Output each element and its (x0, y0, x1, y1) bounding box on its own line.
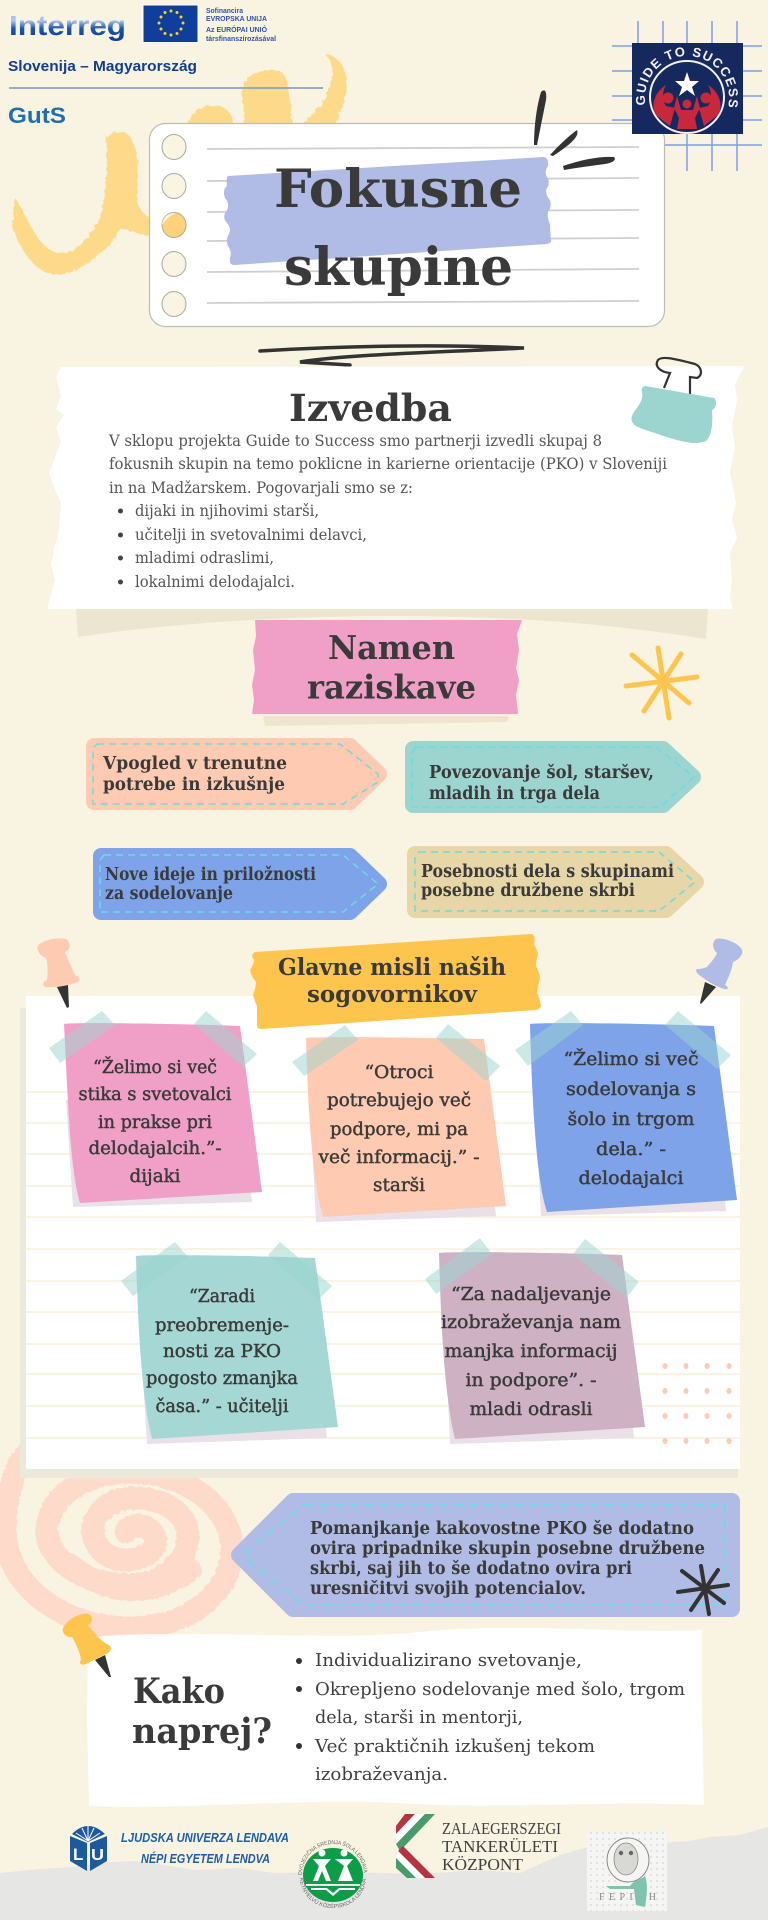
torn gray paper footer (0, 1827, 768, 1920)
binder rings (162, 134, 186, 316)
chevron K (396, 1814, 435, 1878)
quote (317, 1063, 480, 1196)
quote: “Za nadaljevanje (451, 1285, 611, 1305)
project logo: Guide to Success (632, 43, 743, 134)
quote: “Želimo si več (564, 1049, 698, 1070)
name: KÖZPONT (442, 1855, 524, 1874)
arrow: connecting: Povezovanje šol, staršev, (429, 763, 654, 783)
quote: izobraževanja nam (441, 1313, 621, 1333)
recommendations list: izobraževanja. (315, 1764, 448, 1785)
arrow: special groups (415, 852, 696, 911)
arrow: special groups: posebne družbene skrbi (421, 881, 635, 901)
participants list: lokalnimi delodajalci. (135, 573, 295, 591)
recommendations list: Več praktičnih izkušenj tekom (314, 1736, 595, 1757)
recommendations list (296, 1650, 685, 1785)
title: skupine (284, 237, 513, 298)
icon: yellow asterisk (626, 648, 697, 718)
logo: Ljudska univerza Lendava (70, 1826, 289, 1871)
quote: podpore, mi pa (330, 1120, 468, 1140)
name: ZALAEGERSZEGI (442, 1819, 561, 1838)
heading panel: research purpose: raziskave (307, 668, 476, 706)
quote: “Otroci (364, 1063, 434, 1083)
title (274, 159, 522, 298)
quote: dela.” - (596, 1140, 666, 1160)
quote: stika s svetovalci (78, 1085, 232, 1105)
quote: in prakse pri (98, 1113, 212, 1133)
logo: Zalaegerszegi Tankerületi Központ (396, 1814, 561, 1878)
tape (121, 1242, 188, 1296)
arrow: new ideas (100, 855, 379, 912)
quote: manjka informacij (444, 1342, 618, 1362)
EU co-funding text (206, 8, 276, 43)
panel: how forward (87, 1628, 704, 1807)
heading banner: main thoughts: Glavne misli naših (278, 954, 506, 981)
yellow scribble decoration (12, 54, 347, 274)
quote (441, 1285, 621, 1420)
quote: nosti za PKO (163, 1342, 281, 1362)
participants list: dijaki in njihovimi starši, (135, 502, 319, 520)
arrow: connecting: mladih in trga dela (429, 784, 600, 804)
heading shadow (263, 716, 509, 726)
panel: execution shadow (76, 609, 708, 639)
tape (425, 1238, 492, 1294)
logo: green school emblem (298, 1840, 368, 1908)
logo: green school emblem: DVOJEZIČNA SREDNJA ŠOLA LENDAVA (298, 1840, 368, 1875)
quote: delodajalci (578, 1169, 684, 1189)
tape (49, 1011, 115, 1063)
recommendations list: dela, starši in mentorji, (315, 1707, 523, 1728)
blue grid behind project logo (612, 21, 762, 171)
icon: peach pin (37, 938, 79, 1008)
panel: execution (47, 366, 745, 609)
logo: Ljudska univerza Lendava: NÉPI EGYETEM LENDVA (141, 1851, 270, 1866)
logo: owl emblem (587, 1832, 667, 1911)
emphasis marks (534, 90, 615, 170)
owl (614, 1843, 638, 1875)
tape (292, 1025, 358, 1076)
quote: šolo in trgom (568, 1110, 695, 1130)
heading panel: research purpose: Namen (328, 628, 455, 667)
arrow callout: vulnerable groups (239, 1501, 732, 1609)
quote: mladi odrasli (470, 1400, 593, 1420)
arrow: connecting (412, 747, 694, 807)
quote: starši (373, 1176, 425, 1196)
quote: “Želimo si več (93, 1057, 217, 1078)
quote: in podpore”. - (466, 1371, 597, 1391)
participants list (118, 502, 367, 591)
Interreg wordmark: Interreg (9, 10, 126, 41)
arrow callout: vulnerable groups: Pomanjkanje kakovostne PKO še dodatno (310, 1519, 694, 1539)
sticky note: teachers (121, 1242, 338, 1444)
heading: Izvedba: Izvedba (289, 386, 452, 430)
EU flag (143, 5, 198, 42)
panel: quotes paper (20, 996, 740, 1478)
arrow: insight: Vpogled v trenutne (102, 754, 287, 774)
icon: teal binder clip (632, 358, 716, 443)
sticky note: young adults (425, 1238, 645, 1444)
arrow: insight: potrebe in izkušnje (103, 775, 285, 795)
sticky note: parents (292, 1024, 506, 1222)
hand-drawn underline scribble (260, 346, 524, 365)
arrow callout: vulnerable groups: uresničitvi svojih potencialov. (310, 1579, 586, 1599)
participants list: mladimi odraslimi, (135, 549, 274, 567)
quote: “Zaradi (189, 1287, 255, 1307)
intro text: fokusnih skupin na temo poklicne in karierne orientacije (PKO) v Sloveniji (109, 455, 667, 473)
quote: časa.” - učitelji (156, 1397, 289, 1417)
arrow callout: vulnerable groups: skrbi, saj jih to še dodatno ovira pri (310, 1559, 632, 1579)
header: Interreg and EU logos (9, 5, 276, 43)
arrow: new ideas: za sodelovanje (105, 884, 233, 904)
EU co-funding text: Sofinancira (206, 8, 243, 15)
spiral decoration (5, 1450, 232, 1628)
book icon (70, 1826, 107, 1871)
name: LJUDSKA UNIVERZA LENDAVA (121, 1830, 289, 1845)
quote: dijaki (130, 1167, 181, 1187)
intro text: V sklopu projekta Guide to Success smo partnerji izvedli skupaj 8 (108, 432, 602, 450)
quote (78, 1057, 232, 1187)
heading banner: main thoughts (250, 934, 541, 1029)
sticky note: students (49, 1011, 262, 1207)
EU co-funding text: EVROPSKA UNIJA (206, 16, 267, 23)
title: Fokusne (274, 159, 522, 220)
quote: potrebujejo več (327, 1091, 471, 1111)
quote: delodajalcih.”- (88, 1139, 222, 1159)
logo: green school emblem: KÉTNYELVŰ KÖZÉPISKOLA LENDVA (300, 1878, 366, 1908)
icon: dark asterisk (678, 1566, 728, 1614)
intro text (108, 432, 667, 497)
quote: več informacij.” - (317, 1148, 480, 1168)
title card (150, 124, 664, 326)
name: TANKERÜLETI (442, 1837, 558, 1856)
arrow: special groups: Posebnosti dela s skupinami (421, 862, 674, 882)
arrow: insight (93, 744, 379, 804)
recommendations list: Individualizirano svetovanje, (315, 1650, 582, 1671)
title highlight tape (224, 157, 551, 265)
project short name: GutS (8, 103, 66, 128)
ruled lines (207, 147, 639, 303)
heading panel: research purpose (252, 620, 522, 714)
name (442, 1819, 561, 1874)
quote: sodelovanja s (566, 1080, 696, 1100)
recommendations list: Okrepljeno sodelovanje med šolo, trgom (315, 1679, 685, 1700)
quote: preobremenje- (155, 1316, 289, 1336)
panel: how forward: naprej? (132, 1711, 272, 1752)
book icon: U (91, 1847, 104, 1864)
sticky note: employers (515, 1011, 737, 1216)
logo: owl emblem: FEPIÁH (599, 1891, 656, 1903)
programme name: Slovenija – Magyarország (8, 59, 197, 75)
icon: yellow pin (63, 1614, 111, 1677)
quote (564, 1049, 698, 1189)
tape (515, 1011, 583, 1066)
book icon: L (73, 1845, 83, 1864)
heading banner: main thoughts: sogovornikov (307, 981, 478, 1008)
participants list: učitelji in svetovalnimi delavci, (135, 526, 367, 544)
quote: pogosto zmanjka (146, 1369, 298, 1389)
project logo: Guide to Success: GUIDE TO SUCCESS (636, 47, 738, 108)
dot grid (662, 1363, 732, 1444)
quote (146, 1287, 298, 1417)
arrow callout: vulnerable groups: ovira pripadnike skupin posebne družbene (310, 1539, 705, 1559)
EU co-funding text: Az EURÓPAI UNIÓ (206, 25, 268, 34)
EU co-funding text: társfinanszírozásával (206, 36, 276, 43)
icon: periwinkle pin (696, 939, 742, 1004)
arrow: new ideas: Nove ideje in priložnosti (105, 865, 316, 885)
intro text: in na Madžarskem. Pogovarjali smo se z: (109, 479, 413, 497)
heading: Kako naprej: Kako (133, 1671, 225, 1712)
